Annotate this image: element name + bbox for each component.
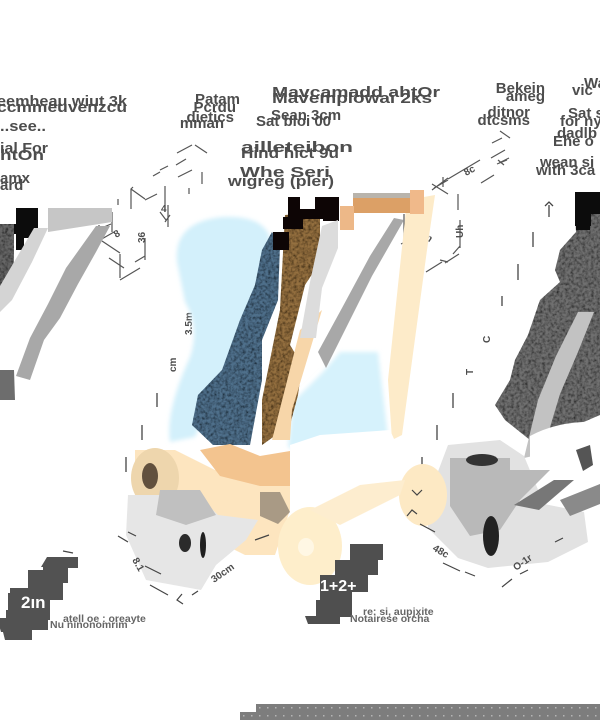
text block: top left specs: ard — [0, 177, 23, 194]
caption: right badge — [350, 606, 434, 625]
badge label: 1+2+ — [320, 578, 356, 595]
dimension diagram: left box: 8 — [112, 228, 123, 241]
dark-blue fur panel — [192, 232, 280, 445]
left frame black fur edge — [12, 208, 38, 250]
right pale wheel — [399, 464, 447, 526]
dimension diagram: base left: 8.1 — [129, 556, 146, 574]
dimension line: height left — [126, 232, 237, 472]
text block: top left specs: amx — [0, 170, 31, 187]
text block: upper right — [477, 80, 545, 129]
pale vertical band — [272, 310, 322, 440]
text block: far right: Ehe o — [553, 133, 594, 150]
text block: top left specs: eemheau wiut 3k — [0, 93, 128, 110]
text block: upper right: ameg — [506, 88, 545, 105]
wooden frame — [340, 190, 435, 440]
grey frame pole right — [318, 218, 404, 368]
grey lower left wheel — [126, 495, 258, 590]
text block: upper centre — [227, 84, 440, 190]
right frame white blob — [530, 422, 600, 506]
dimension diagram: base right: O-1r — [511, 553, 535, 573]
left frame poles — [16, 226, 110, 380]
text block: far right: dadlb — [557, 125, 597, 142]
upper light-blue blob — [169, 217, 270, 442]
dimension line: height right: T — [465, 369, 476, 375]
right frame wheels — [428, 440, 588, 568]
centre fur panels — [192, 197, 404, 445]
caption: right badge: Notairese orcha — [350, 613, 430, 625]
caption: left badge: atell oe : oreayte — [63, 613, 146, 625]
dimension line: height right — [422, 202, 553, 472]
text block: upper middle left — [180, 91, 240, 132]
dimension diagram: base right: 48c — [430, 543, 451, 561]
right frame pole — [524, 312, 594, 458]
wooden upright — [388, 195, 435, 440]
text block: upper centre: Hind hict 9u — [241, 145, 339, 162]
dimension diagram: base left — [63, 532, 269, 604]
text block: far right: wean si — [539, 154, 594, 171]
centre light-blue panels — [169, 217, 388, 462]
black fur edge — [273, 197, 339, 250]
dimension diagram: left box: 36 — [137, 231, 148, 243]
dimension diagram: right box — [401, 131, 510, 272]
grey frame pole left — [300, 220, 338, 338]
badge: age — [305, 544, 383, 624]
bottom strip — [240, 704, 600, 720]
text block: upper centre: Mavcamadd ahtOr — [272, 84, 440, 101]
badge: 2 in 1 — [0, 557, 78, 640]
text block: far right: with 3ca — [535, 162, 596, 179]
text block: far right — [535, 75, 600, 179]
text block: upper right: ditnor — [488, 104, 530, 121]
text block: upper right: dtcsms — [477, 112, 530, 129]
text block: upper centre: Sat bloi 00 — [256, 113, 331, 130]
centre cart base — [126, 430, 447, 590]
text block: upper centre: wigreg (pler) — [227, 173, 334, 190]
text block: upper middle left: dietics — [186, 109, 234, 126]
left tan wheel — [131, 448, 179, 508]
dimension diagram: left box — [97, 145, 207, 280]
dimension diagram: right box: cm — [416, 227, 435, 245]
text block: far right: vic — [572, 82, 593, 99]
dimension line: height left: 3.5m — [184, 312, 195, 335]
white cushion — [290, 430, 408, 525]
dimension diagram: right box: 8c — [462, 164, 478, 179]
brown fur panel — [262, 212, 320, 445]
caption: left badge — [50, 613, 146, 631]
right frame fur panel — [495, 195, 600, 440]
dimension diagram: base right — [407, 490, 563, 587]
text block: top left specs: htOn — [0, 147, 44, 164]
text block: upper middle left: Pcrdu — [193, 99, 236, 116]
left frame top bar — [48, 208, 112, 232]
dimension diagram: right box: Uh — [455, 225, 466, 238]
text block: upper right: Bekein — [496, 80, 545, 97]
right grey walker frame — [428, 192, 600, 568]
dimension diagram: base left: 30cm — [209, 562, 237, 585]
text block: top left specs — [0, 93, 128, 194]
text block: upper middle left: mman — [180, 115, 224, 132]
text block: upper centre: Mavemplowai 2ks — [272, 90, 432, 107]
text block: upper middle left: Patam — [195, 91, 240, 108]
dimension line: height right: C — [482, 336, 493, 343]
dimension line: height left: cm — [168, 357, 179, 372]
text block: top left specs: ..see.. — [0, 118, 46, 135]
caption: left badge: Nu ninonomrim — [50, 619, 128, 631]
left grey walker frame — [0, 208, 112, 400]
text block: top left specs: ial For — [0, 140, 48, 157]
pale axle — [135, 450, 290, 555]
text block: upper centre: Whe Seri — [240, 164, 330, 181]
wooden top bar — [353, 197, 417, 213]
badge label: 2ın — [21, 593, 46, 612]
front pale wheel — [278, 507, 342, 585]
caption: right badge: re: si, aupjxite — [363, 606, 434, 618]
dimension diagram: left box: 4 — [161, 204, 167, 215]
text block: upper centre: Sean 3cm — [271, 107, 341, 124]
text block: top left specs: ccmmeuvenzcu — [0, 99, 127, 116]
lower light-blue blob — [288, 352, 388, 462]
text block: upper centre: ailleteibon — [241, 139, 353, 156]
left frame fur panel — [0, 224, 14, 290]
